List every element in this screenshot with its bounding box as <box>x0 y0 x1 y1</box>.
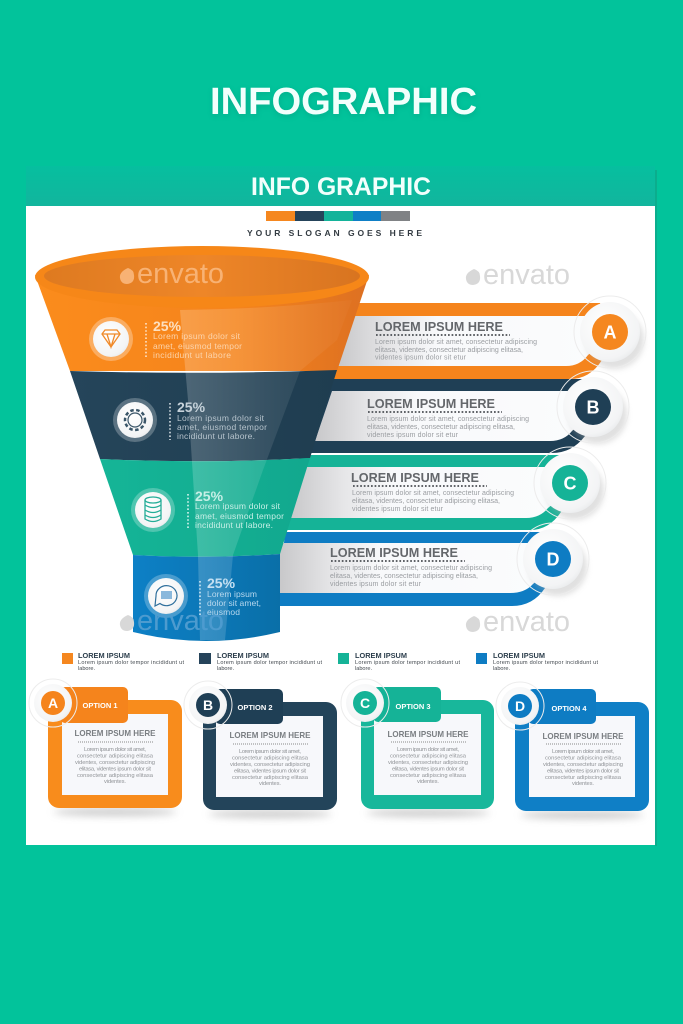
tier 4 text: dolor sit amet, <box>207 598 261 608</box>
legend item 1: labore. <box>78 666 95 672</box>
card D text: Lorem ipsum dolor sit amet, <box>552 749 614 755</box>
card B heading: LOREM IPSUM HERE <box>230 730 311 740</box>
ribbon A heading: LOREM IPSUM HERE <box>375 320 503 334</box>
tier 1 text: incididunt ut labore <box>153 350 231 360</box>
badge C <box>534 447 606 520</box>
watermarks: envato <box>137 605 224 637</box>
ribbon C body: Lorem ipsum dolor sit amet, consectetur adipiscing <box>352 490 514 497</box>
legend item 1: LOREM IPSUM <box>78 653 130 660</box>
card C heading: LOREM IPSUM HERE <box>388 729 469 739</box>
watermarks <box>120 258 570 638</box>
panel shadow edge <box>655 170 657 846</box>
ribbon A body: elitasa, videntes, consectetur adipiscing elitasa, <box>375 347 523 354</box>
legend item 2: labore. <box>217 666 234 672</box>
icon: gear <box>113 398 157 442</box>
card B tab: OPTION 2 <box>238 703 272 712</box>
ribbon C body: videntes ipsum dolor sit etur <box>352 506 444 513</box>
ribbon D body: videntes ipsum dolor sit etur <box>330 581 422 588</box>
funnel glass highlight <box>180 300 352 640</box>
card C text: consectetur adipiscing elitasa <box>390 754 467 760</box>
card A text: videntes, consectetur adipiscing <box>75 760 155 766</box>
tier 1 text: amet, eiusmod tempor <box>153 341 242 351</box>
card B badge <box>184 681 232 729</box>
ribbon D <box>278 532 556 606</box>
ribbon D body: elitasa, videntes, consectetur adipiscing elitasa, <box>330 573 478 580</box>
ribbon D heading: LOREM IPSUM HERE <box>330 546 458 560</box>
card D text: consectetur adipiscing elitasa <box>545 775 622 781</box>
badge A <box>574 296 646 369</box>
card D tab <box>528 689 596 724</box>
main title: INFOGRAPHIC <box>210 81 477 123</box>
legend item 2: LOREM IPSUM <box>217 653 269 660</box>
watermarks: envato <box>483 259 570 291</box>
tier 4 text: Lorem ipsum <box>207 589 257 599</box>
funnel rim <box>35 246 369 308</box>
tier 1 percent: 25% <box>153 318 182 334</box>
legend item 2: Lorem ipsum dolor tempor incididunt ut <box>217 660 322 666</box>
tier 2 text: Lorem ipsum dolor sit <box>177 413 265 423</box>
tier 2 content <box>113 398 267 442</box>
panel: infographic sheet <box>26 166 655 845</box>
card A tab: OPTION 1 <box>82 701 118 710</box>
card C badge <box>341 679 389 727</box>
card C badge: C <box>360 695 370 711</box>
ribbon C body: elitasa, videntes, consectetur adipiscing elitasa, <box>352 498 500 505</box>
card D badge <box>496 682 544 730</box>
card B text: videntes, consectetur adipiscing <box>230 762 310 768</box>
tier 3 text: incididunt ut labore. <box>195 520 273 530</box>
ribbon B body: videntes ipsum dolor sit etur <box>367 432 459 439</box>
ribbon C <box>285 455 572 530</box>
icon: diamond <box>89 317 133 361</box>
tier 2 percent: 25% <box>177 399 206 415</box>
card D text: videntes, consectetur adipiscing <box>543 762 623 768</box>
card B text: elitasa, videntes ipsum dolor sit <box>234 768 306 774</box>
tier 3 content <box>131 488 284 532</box>
card C text: consectetur adipiscing elitasa <box>390 773 467 779</box>
panel header band <box>26 166 655 206</box>
badge D: D <box>546 550 560 570</box>
card A <box>29 679 182 816</box>
legend item 2 <box>199 653 322 672</box>
tier 4 text: eiusmod <box>207 607 240 617</box>
card A tab <box>60 687 128 723</box>
funnel tier: blue <box>133 554 280 641</box>
badge B <box>557 371 629 444</box>
card A badge: A <box>48 695 58 711</box>
ribbon A <box>330 303 612 379</box>
slogan: YOUR SLOGAN GOES HERE <box>247 228 422 238</box>
card B text: consectetur adipiscing elitasa <box>232 775 309 781</box>
tier 2 text: amet, eiusmod tempor <box>177 422 267 432</box>
card A text: consectetur adipiscing elitasa <box>77 754 154 760</box>
card B text: videntes. <box>259 781 281 787</box>
ribbon B heading: LOREM IPSUM HERE <box>367 397 495 411</box>
badge D <box>517 523 589 596</box>
tier 1 content <box>89 317 242 361</box>
icon: database <box>131 488 175 532</box>
main title: INFOGRAPHIC <box>210 83 478 125</box>
ribbon B body: Lorem ipsum dolor sit amet, consectetur adipiscing <box>367 416 529 423</box>
ribbon D body: Lorem ipsum dolor sit amet, consectetur adipiscing <box>330 565 492 572</box>
tier 1 text: Lorem ipsum dolor sit <box>153 331 241 341</box>
card D text: videntes. <box>572 781 594 787</box>
legend item 3: Lorem ipsum dolor tempor incididunt ut <box>355 660 460 666</box>
card D text: elitasa, videntes ipsum dolor sit <box>547 768 619 774</box>
funnel tier: orange <box>35 275 369 371</box>
card D tab: OPTION 4 <box>552 704 587 713</box>
card C text: elitasa, videntes ipsum dolor sit <box>392 766 464 772</box>
tier 3 percent: 25% <box>195 488 224 504</box>
funnel tier: navy <box>70 370 337 461</box>
legend item 3: LOREM IPSUM <box>355 653 407 660</box>
tier 3 text: amet, eiusmod tempor <box>195 511 284 521</box>
tier 2 text: incididunt ut labore. <box>177 431 255 441</box>
watermarks: envato <box>137 258 224 290</box>
ribbon B body: elitasa, videntes, consectetur adipiscing elitasa, <box>367 424 515 431</box>
legend item 4: LOREM IPSUM <box>493 653 545 660</box>
legend item 1 <box>62 653 184 672</box>
card D badge: D <box>515 698 525 714</box>
badge C: C <box>564 474 576 494</box>
card C text: Lorem ipsum dolor sit amet, <box>397 747 459 753</box>
funnel <box>35 246 369 641</box>
card A heading: LOREM IPSUM HERE <box>74 728 156 738</box>
card A badge <box>29 679 77 727</box>
tier 3 text: Lorem ipsum dolor sit <box>195 501 281 511</box>
ribbon C heading: LOREM IPSUM HERE <box>351 471 479 485</box>
icon: chat bubble <box>144 574 188 618</box>
card C text: videntes. <box>417 779 439 785</box>
tier 4 percent: 25% <box>207 575 236 591</box>
card A text: Lorem ipsum dolor sit amet, <box>84 747 146 753</box>
card D text: consectetur adipiscing elitasa <box>545 756 622 762</box>
card A text: elitasa, videntes ipsum dolor sit <box>79 766 151 772</box>
colour bar <box>266 211 410 221</box>
card B <box>184 681 337 818</box>
card D heading: LOREM IPSUM HERE <box>542 731 624 741</box>
ribbon A body: Lorem ipsum dolor sit amet, consectetur adipiscing <box>375 339 537 346</box>
legend item 4: Lorem ipsum dolor tempor incididunt ut <box>493 660 598 666</box>
panel heading: INFO GRAPHIC <box>251 173 431 201</box>
card B text: consectetur adipiscing elitasa <box>232 756 309 762</box>
card C <box>341 679 494 817</box>
card C text: videntes, consectetur adipiscing <box>388 760 468 766</box>
card C tab: OPTION 3 <box>396 702 430 711</box>
card B text: Lorem ipsum dolor sit amet, <box>239 749 301 755</box>
badge B: B <box>586 398 600 418</box>
card D <box>496 682 649 819</box>
badge A: A <box>604 322 616 342</box>
card C tab <box>373 687 441 722</box>
card A text: consectetur adipiscing elitasa <box>77 773 154 779</box>
watermarks: envato <box>483 606 570 638</box>
funnel tier: teal <box>100 458 310 557</box>
legend item 3: labore. <box>355 666 372 672</box>
legend item 4: labore. <box>493 666 510 672</box>
ribbon B <box>305 379 595 453</box>
legend <box>62 653 598 672</box>
legend item 1: Lorem ipsum dolor tempor incididunt ut <box>78 660 184 666</box>
legend item 4 <box>476 653 598 672</box>
card B badge: B <box>203 697 213 713</box>
ribbon A body: videntes ipsum dolor sit etur <box>375 354 467 362</box>
tier 4 content <box>144 574 261 618</box>
card A text: videntes. <box>104 779 126 785</box>
card B tab <box>215 689 283 724</box>
legend item 3 <box>338 653 460 672</box>
